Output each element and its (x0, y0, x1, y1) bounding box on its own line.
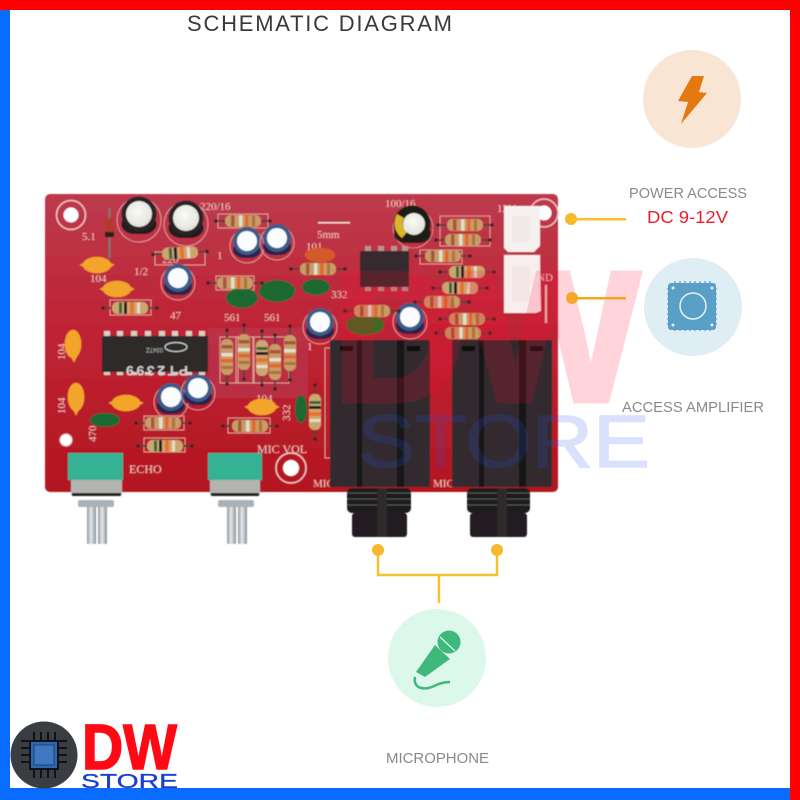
5mm wire link (318, 222, 350, 224)
icon: power lightning bolt (643, 50, 741, 148)
label: voltage: DC 9-12V (647, 207, 728, 227)
logo: chip badge (10, 722, 78, 788)
audio jack left (330, 340, 430, 537)
mounting holes (56, 199, 558, 483)
audio jack right (452, 340, 552, 537)
white connectors (504, 206, 547, 323)
board silk-screen labels: ND (537, 272, 553, 284)
label: access amplifier: ACCESS AMPLIFIER (622, 400, 764, 416)
connector line: power (565, 213, 626, 225)
board silk-screen labels: 220/16 (200, 201, 231, 213)
board silk-screen labels: 104 (56, 397, 68, 414)
board silk-screen labels: 47 (170, 310, 182, 322)
diode (105, 208, 114, 258)
icon: microphone (388, 609, 486, 707)
IC chip PT2399 (102, 331, 208, 379)
ceramic capacitors (65, 248, 335, 415)
potentiometer: echo (68, 453, 123, 544)
board silk-screen labels: 12V (497, 203, 516, 215)
title: SCHEMATIC DIAGRAM (187, 11, 452, 36)
board silk-screen labels: 1/2 (134, 266, 148, 278)
board silk-screen labels: MIC VOL (257, 442, 307, 456)
board silk-screen labels: 332 (281, 404, 293, 421)
board silk-screen labels: MIC (313, 478, 334, 490)
connector line: amplifier (566, 292, 626, 304)
icon: amplifier chip (644, 258, 742, 356)
watermark: STORE: STORE (358, 400, 650, 483)
board silk-screen labels (56, 198, 553, 490)
board silk-screen labels: 332 (331, 289, 348, 301)
silk-screen tint area (208, 328, 308, 398)
logo: DW wordmark: DW (82, 711, 178, 783)
board silk-screen labels: 104 (90, 273, 107, 285)
board silk-screen labels: 100/16 (385, 198, 416, 210)
IC chip PT2399: PT2399 (126, 363, 188, 379)
electrolytic capacitors (117, 196, 433, 419)
board silk-screen labels: 5.1 (82, 231, 96, 243)
board silk-screen labels: 220 (162, 254, 179, 266)
board silk-screen labels: ECHO (129, 462, 162, 476)
board silk-screen labels: 5mm (317, 229, 340, 241)
board silk-screen labels: MIC (433, 478, 454, 490)
film capacitors (90, 279, 384, 427)
label: power access: POWER ACCESS (629, 186, 747, 202)
panel: red PCB (45, 194, 558, 492)
board silk-screen labels: 1 (217, 250, 222, 262)
board silk-screen labels: 104 (256, 393, 273, 405)
silk-screen outlines (110, 214, 490, 458)
board silk-screen labels: 561 (224, 312, 240, 324)
IC chip op-amp (360, 246, 409, 291)
board silk-screen labels: 104 (56, 343, 68, 360)
label: microphone: MICROPHONE (386, 751, 489, 767)
watermark: DW: DW (332, 234, 640, 441)
board silk-screen labels: 561 (264, 312, 280, 324)
logo: STORE wordmark: STORE (81, 771, 178, 793)
IC chip PT2399: 0347Z (146, 346, 163, 352)
connector bracket: microphone (372, 544, 503, 603)
circuit board photo (45, 194, 558, 544)
potentiometer: mic volume (208, 453, 262, 544)
board silk-screen labels: 101 (306, 241, 322, 253)
resistors (101, 215, 496, 452)
board silk-screen labels: 470 (87, 425, 99, 442)
board silk-screen labels: 1 (307, 341, 312, 353)
